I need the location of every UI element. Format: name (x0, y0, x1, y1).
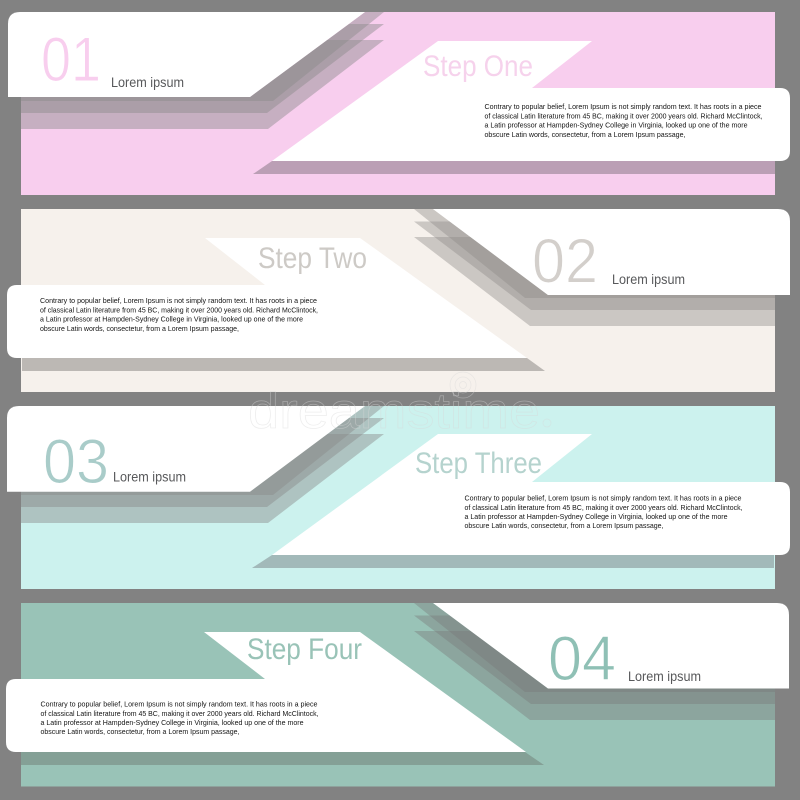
body text: a Latin professor at Hampden-Sydney College in Virginia, looked up one of the more (40, 314, 303, 324)
number 03: 03 (43, 427, 109, 497)
green background (21, 603, 775, 786)
body text: Contrary to popular belief, Lorem Ipsum is not simply random text. It has roots in a piece (464, 494, 742, 502)
layered diagonal stripes (21, 406, 384, 523)
number 01: 01 (41, 25, 101, 95)
bottom shadow stripe (21, 752, 544, 765)
body text: of classical Latin literature from 45 BC, making it over 2000 years old. Richard McClintock, (40, 305, 318, 314)
white number banner (7, 406, 365, 492)
heading: step four: Step Four (247, 633, 362, 666)
white step and text card (6, 632, 526, 752)
label: Lorem ipsum (111, 74, 184, 90)
body text: a Latin professor at Hampden-Sydney College in Virginia, looked up one of the more (464, 512, 728, 521)
pink background (21, 12, 775, 195)
heading: step three: Step Three (415, 447, 542, 480)
body text: obscure Latin words, consectetur, from a Lorem Ipsum passage, (40, 727, 240, 736)
body text: a Latin professor at Hampden-Sydney College in Virginia, looked up one of the more (484, 120, 748, 130)
panel: step one (8, 12, 790, 195)
cream background (21, 209, 775, 392)
aqua background (21, 406, 775, 589)
body text: Contrary to popular belief, Lorem Ipsum is not simply random text. It has roots in a piece (40, 700, 318, 708)
body text: Contrary to popular belief, Lorem Ipsum is not simply random text. It has roots in a piece (40, 296, 317, 305)
body text: a Latin professor at Hampden-Sydney College in Virginia, looked up one of the more (40, 718, 304, 727)
body text: of classical Latin literature from 45 BC, making it over 2000 years old. Richard McClintock, (464, 503, 742, 512)
white number banner (433, 603, 789, 688)
body text: of classical Latin literature from 45 BC, making it over 2000 years old. Richard McClintock, (484, 111, 762, 120)
watermark (248, 372, 551, 439)
panel: step two (7, 209, 790, 392)
watermark spiral (450, 372, 476, 398)
body text (40, 296, 318, 333)
white step and text card (7, 238, 527, 358)
body text: Contrary to popular belief, Lorem Ipsum is not simply random text. It has roots in a piece (484, 102, 762, 111)
panel: step four (6, 603, 789, 786)
body text (40, 700, 318, 736)
body text: obscure Latin words, consectetur, from a Lorem Ipsum passage, (484, 130, 686, 139)
panel: step three (7, 406, 790, 589)
body text (484, 102, 762, 139)
body text (464, 494, 742, 530)
white step and text card (272, 434, 790, 555)
heading: step two: Step Two (258, 242, 367, 275)
watermark registered mark (543, 419, 551, 427)
number 02: 02 (532, 226, 598, 296)
layered diagonal stripes (21, 12, 384, 129)
heading: step one: Step One (423, 50, 533, 83)
label: Lorem ipsum (113, 468, 186, 484)
bottom shadow stripe (253, 161, 775, 174)
white number banner (433, 209, 790, 295)
label: Lorem ipsum (612, 271, 685, 287)
bottom shadow stripe (252, 555, 774, 568)
label: Lorem ipsum (628, 668, 701, 684)
layered diagonal stripes (414, 209, 775, 326)
white step and text card (272, 41, 790, 161)
body text: obscure Latin words, consectetur, from a Lorem Ipsum passage, (464, 521, 664, 530)
number 04: 04 (548, 624, 616, 694)
bottom shadow stripe (22, 358, 545, 371)
white number banner (8, 12, 365, 97)
body text: obscure Latin words, consectetur, from a Lorem Ipsum passage, (40, 324, 239, 333)
watermark wordmark: dreamstime (248, 383, 540, 439)
body text: of classical Latin literature from 45 BC, making it over 2000 years old. Richard McClintock, (40, 709, 318, 718)
layered diagonal stripes (414, 603, 775, 720)
